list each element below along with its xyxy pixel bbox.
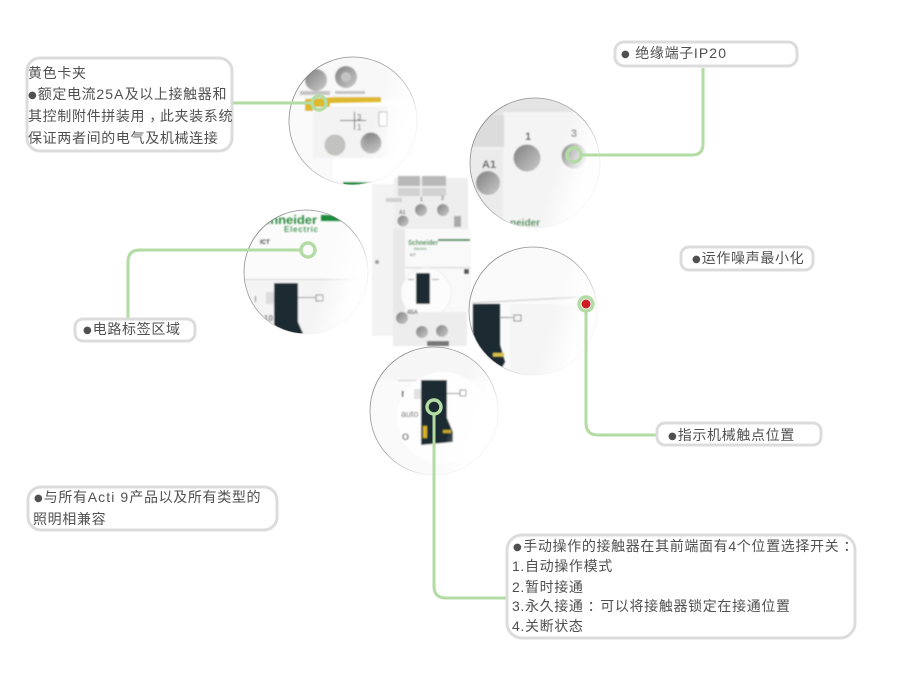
photo circle: yellow clip — [289, 57, 417, 186]
photo circle: status indicator — [469, 247, 600, 377]
photo circle: circuit label area: ICT — [260, 240, 270, 246]
callout: manual operation: 3.永久接通 ：可以将接触器锁定在接通位置 — [512, 598, 791, 614]
photo circle: circuit label area: 10 — [264, 314, 273, 323]
callout: yellow clip — [27, 58, 233, 151]
callout: contact position — [657, 423, 821, 445]
callout: manual operation: ： — [843, 538, 858, 554]
contactor device photo: 45A — [407, 310, 419, 316]
callout: circuit label area — [75, 319, 195, 341]
connector: IP20 terminals — [567, 68, 703, 162]
callout: yellow clip: 其控制附件拼装用 ，此夹装系统 — [28, 108, 233, 124]
callout: low noise: ● — [692, 254, 702, 265]
callout: circuit label area: 电路标签区域 — [93, 321, 181, 337]
callout: manual operation: 4.关断状态 — [512, 618, 584, 634]
callout: IP20 terminals: ● — [621, 49, 631, 60]
photo circle: terminals: 3 — [571, 128, 577, 140]
callout: IP20 terminals: 绝缘端子 — [631, 45, 694, 61]
contactor device photo: 3 — [441, 196, 444, 202]
contactor device photo: Electric — [414, 247, 427, 251]
photo circle: terminals: 1 — [525, 131, 531, 143]
callout: Acti 9 compatibility: 照明相兼容 — [33, 511, 106, 527]
callout: Acti 9 compatibility: ● — [34, 493, 44, 504]
connector: circuit label area — [128, 243, 315, 318]
callout: manual operation: 手动操作的接触器在其前端面有4个位置选择开关 — [523, 538, 839, 554]
photo circle: terminals — [470, 98, 603, 230]
connector: yellow clip — [233, 96, 326, 110]
contactor device photo: Schneider — [408, 240, 438, 247]
callout: Acti 9 compatibility — [28, 487, 277, 530]
contactor device photo: ICT — [410, 253, 416, 257]
callout: Acti 9 compatibility: 与所有 — [44, 489, 88, 505]
photo circle: handle — [370, 347, 500, 475]
photo circle: terminals: neider — [510, 218, 540, 229]
callout: yellow clip: 保证两者间的电气及机械连接 — [28, 130, 218, 146]
callout: manual operation: ● — [513, 542, 523, 553]
callout: yellow clip: ● — [28, 90, 38, 101]
photo circle: yellow clip: 3 — [357, 113, 362, 122]
callout: IP20 terminals: IP20 — [694, 45, 727, 61]
callout: circuit label area: ● — [83, 325, 93, 336]
callout: yellow clip: 额定电流 — [38, 86, 96, 102]
photo circle: terminals: A1 — [482, 159, 496, 171]
photo circle: yellow clip: 1 — [357, 123, 362, 132]
photo circle: circuit label area — [244, 210, 369, 339]
photo circle: handle: auto — [401, 409, 419, 419]
callout: IP20 terminals — [615, 42, 797, 66]
photo circle: circuit label area: Electric — [284, 225, 319, 234]
callout: contact position: ● — [668, 431, 678, 442]
photo circle: handle: O — [402, 432, 409, 442]
callout: manual operation: 1.自动操作模式 — [512, 558, 613, 574]
callout: Acti 9 compatibility: Acti 9产品以及所有类型的 — [88, 489, 261, 505]
contactor device photo: A1 — [399, 210, 406, 216]
callout: low noise — [681, 247, 813, 270]
contactor device photo: 1 — [420, 197, 423, 203]
connector: manual operation — [427, 400, 506, 598]
callout: low noise: 运作噪声最小化 — [702, 250, 804, 266]
callout: manual operation: 2.暂时接通 — [512, 579, 584, 595]
photo circle: circuit label area: chneider — [263, 213, 317, 227]
callout: manual operation — [507, 535, 858, 638]
callout: yellow clip: 黄色卡夹 — [28, 65, 87, 81]
connector: contact position — [579, 297, 656, 435]
icon: red contact indicator — [582, 300, 590, 308]
callout: contact position: 指示机械触点位置 — [678, 427, 795, 443]
callout: yellow clip: 25A及以上接触器和 — [96, 86, 227, 102]
contactor device photo — [372, 176, 471, 346]
